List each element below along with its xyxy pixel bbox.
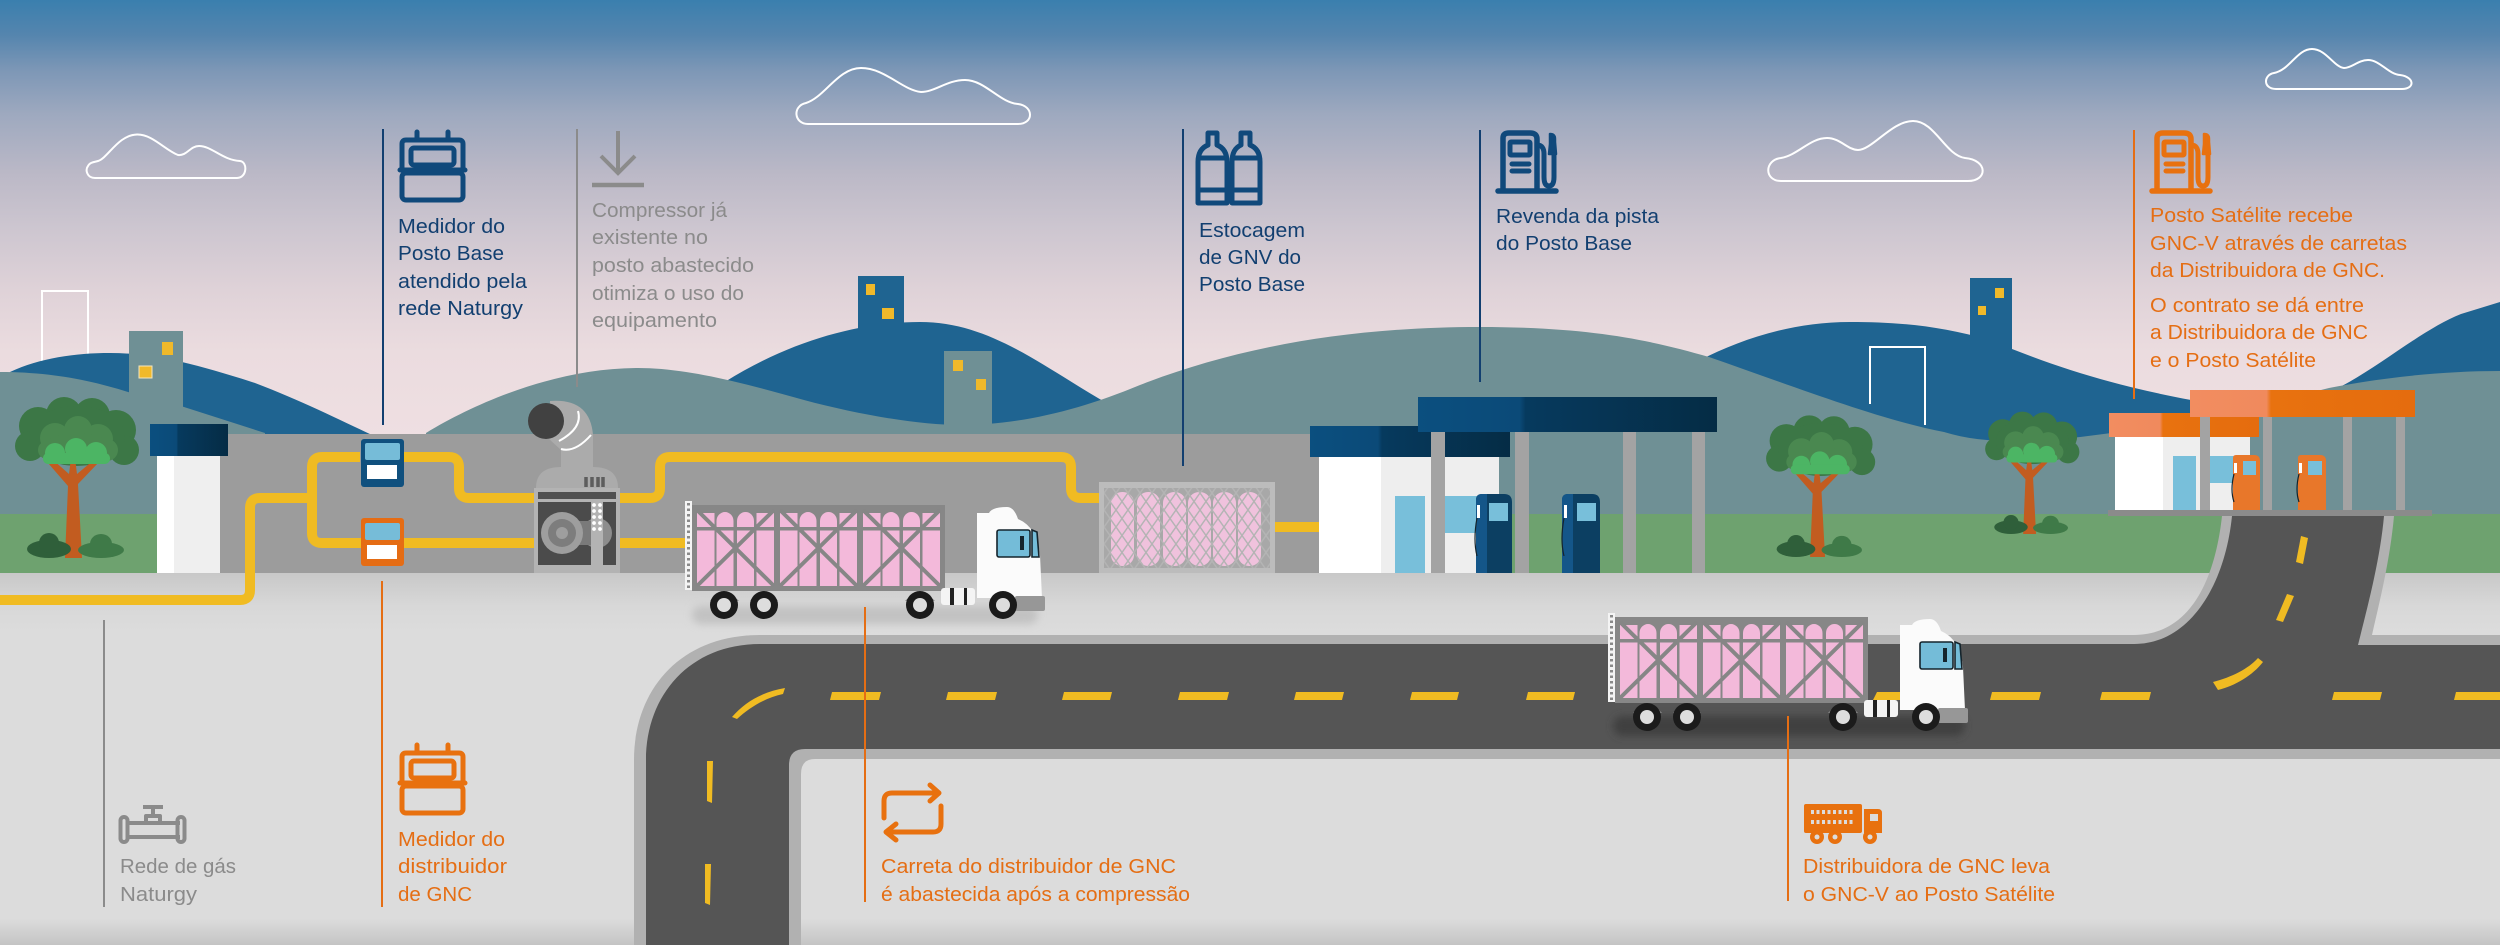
Posto Base canopy [1418,397,1717,573]
text: Medidor do Posto Base: Posto Base [398,242,504,265]
icon: distribuidor meter [400,745,465,813]
text: Posto Satélite [2150,204,2407,372]
icon: Posto Base meter [400,132,465,200]
meter: Posto Base [361,439,404,487]
teal hill range [426,327,2500,573]
blue tower centre [858,276,904,342]
text: Posto Satélite: da Distribuidora de GNC. [2150,259,2385,282]
blue tower right [1970,278,2012,350]
text: Revenda da pista: Revenda da pista [1496,205,1660,228]
text: Posto Satélite: O contrato se dá entre [2150,294,2364,317]
text: Posto Satélite: Posto Satélite recebe [2150,204,2353,227]
text: Carreta do distribuidor: é abastecida após a compressão [881,883,1190,906]
text: Medidor do distribuidor: distribuidor [398,855,507,878]
icon: transfer arrows [884,785,941,840]
gas pipeline [0,457,1320,600]
outline building right [1870,347,1925,425]
tree middle right [1766,415,1875,557]
icon: gas pipe [120,807,184,842]
tree right [1985,412,2079,534]
text: compressor: existente no [592,226,708,249]
text: Medidor do Posto Base: Medidor do [398,215,505,238]
text: Revenda da pista [1496,205,1660,255]
text: Distribuidora de GNC: Distribuidora de GNC leva [1803,855,2051,878]
truck 2 [1608,613,1968,731]
cloud 2 [796,68,1030,124]
icon: download arrow [592,131,644,185]
text: Posto Satélite: GNC-V através de carretas [2150,232,2407,255]
text: compressor: posto abastecido [592,254,754,277]
text: Rede de gás Naturgy: Naturgy [120,883,198,906]
text: Medidor do distribuidor: de GNC [398,883,472,906]
text: Medidor do Posto Base: atendido pela [398,270,528,293]
text: compressor: Compressor já [592,199,728,222]
meter: distribuidor GNC [361,518,404,566]
text: Medidor do Posto Base: rede Naturgy [398,297,524,320]
icon: distribution truck [1804,804,1882,844]
text: Medidor do Posto Base [398,215,528,320]
road [634,516,2500,945]
text: Distribuidora de GNC [1803,855,2055,906]
icon: Posto Satélite fuel pump [2152,133,2210,191]
text: Rede de gás Naturgy [120,855,236,906]
text: Carreta do distribuidor: Carreta do distribuidor de GNC [881,855,1176,878]
text: compressor: otimiza o uso do [592,282,744,305]
blue hill right [1700,302,2500,445]
small white building left [150,424,228,573]
text: Posto Satélite: e o Posto Satélite [2150,349,2316,372]
text: compressor: equipamento [592,309,717,332]
compressor [528,401,620,573]
text: Distribuidora de GNC: o GNC-V ao Posto Satélite [1803,883,2055,906]
icon: Posto Base fuel pump [1498,133,1556,191]
icon: gas cylinders [1198,133,1260,203]
gray wall [215,434,1325,574]
text: compressor [592,199,754,332]
storage cage [1099,482,1275,573]
text: Estocagem: de GNV do [1199,246,1301,269]
text: Estocagem: Estocagem [1199,219,1305,242]
text: Medidor do distribuidor [398,828,507,906]
cloud 3 [1768,121,1983,181]
teal hill left [0,372,265,573]
truck 1 shadow [692,606,1038,624]
Posto Base pumps [1475,494,1600,573]
road centre dashes [705,536,2500,905]
tree left [15,397,139,558]
cloud 4 [2266,49,2412,89]
Posto Base building [1310,426,1510,573]
sky background [0,0,2500,440]
blue hill left [10,353,372,445]
text: Estocagem: Posto Base [1199,273,1305,296]
Posto Satélite station [2108,390,2432,516]
text: Medidor do distribuidor: Medidor do [398,828,505,851]
cloud 1 [87,134,245,178]
callout lines [104,129,2134,907]
blue hill centre [720,322,1110,440]
truck 2 shadow [1613,716,1965,736]
text: Estocagem [1199,219,1305,296]
text: Posto Satélite: a Distribuidora de GNC [2150,321,2368,344]
text: Rede de gás Naturgy: Rede de gás [120,855,236,878]
grass strip [0,514,2500,574]
teal tower left [129,331,183,411]
teal tower centre [944,351,992,427]
outline building left [42,291,88,362]
ground [0,573,2500,945]
truck 1 [685,501,1045,619]
text: Revenda da pista: do Posto Base [1496,232,1632,255]
text: Carreta do distribuidor [881,855,1190,906]
